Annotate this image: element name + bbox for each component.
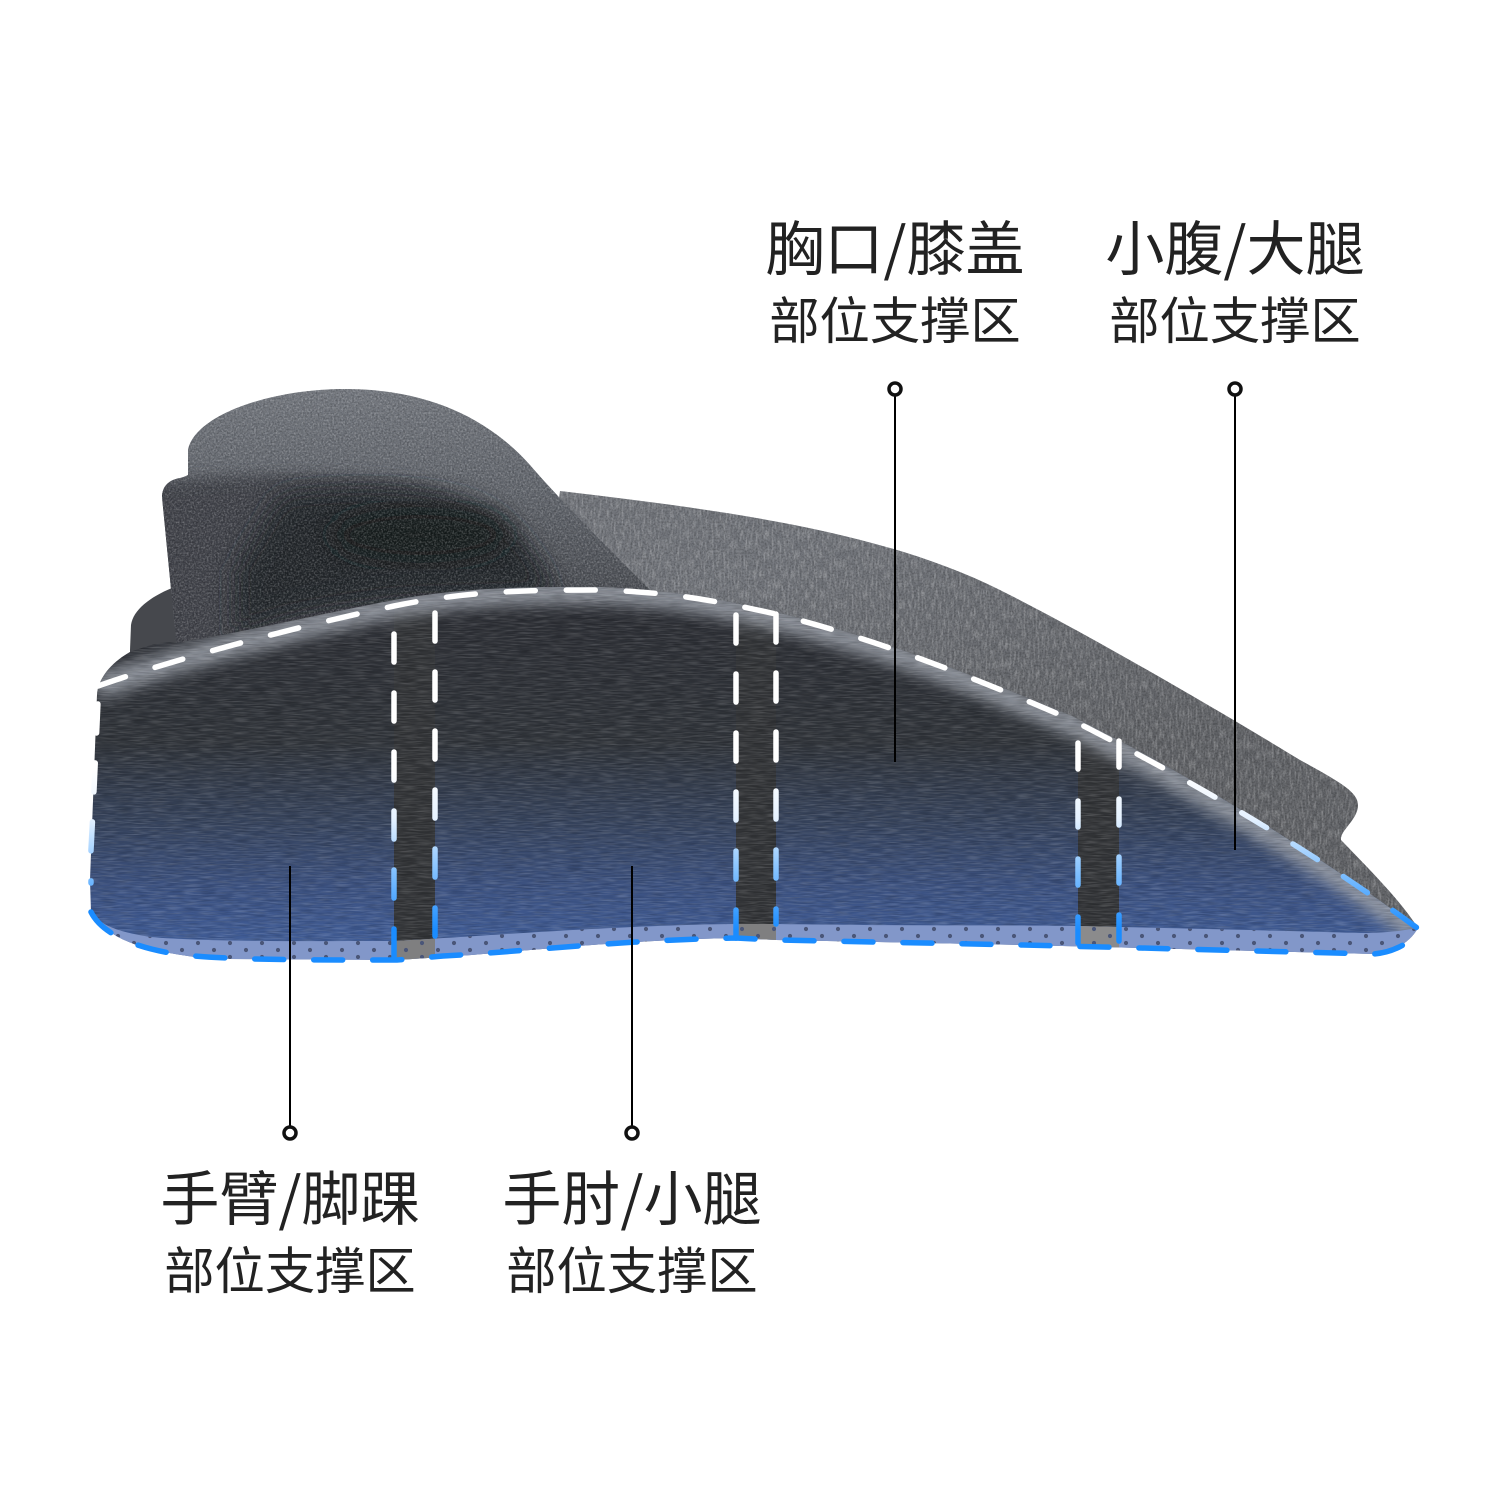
front face panel (80, 580, 1430, 965)
callout: elbow and calf (502, 866, 762, 1304)
back left lobe (130, 588, 190, 672)
gap base 1 (396, 938, 435, 960)
gap base 3 (1080, 926, 1119, 948)
gap base 2 (738, 924, 776, 940)
callout: elbow and calf: 部位支撑区 (506, 1232, 758, 1304)
support gap 3 (1078, 720, 1119, 930)
callout: chest and knee: 胸口/膝盖 (765, 202, 1025, 287)
left side dashed contour (91, 702, 98, 883)
callout: arm and ankle (160, 866, 420, 1304)
support gap 2 (736, 600, 776, 930)
support gap 1 (394, 755, 435, 941)
white dashed top contour (98, 590, 1420, 930)
callout: elbow and calf: 手肘/小腿 (502, 1152, 762, 1237)
perforated base strip (102, 922, 1417, 960)
callout: lower belly and thigh (1105, 202, 1365, 850)
callout: arm and ankle: 部位支撑区 (164, 1232, 416, 1304)
callout: arm and ankle: 手臂/脚踝 (160, 1152, 420, 1237)
blue dashed bottom contour (91, 912, 1418, 960)
callout: lower belly and thigh: 部位支撑区 (1109, 282, 1361, 354)
face top rim highlight (97, 592, 1418, 932)
callout: lower belly and thigh: 小腹/大腿 (1105, 202, 1365, 287)
callout: chest and knee: 部位支撑区 (769, 282, 1021, 354)
back wedge surface (559, 491, 1414, 922)
head rest block (162, 389, 650, 643)
vertical dashed lines (394, 613, 1119, 960)
callout: chest and knee (765, 202, 1025, 762)
